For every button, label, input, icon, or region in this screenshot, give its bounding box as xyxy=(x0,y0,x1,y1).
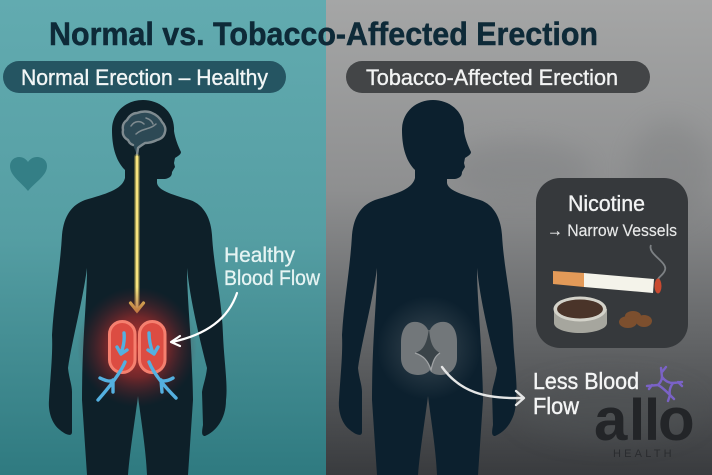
silhouette: tobacco body xyxy=(339,100,517,475)
logo: allo health: l xyxy=(644,388,660,453)
logo: allo health: a xyxy=(594,386,628,453)
icon: heart xyxy=(10,157,47,191)
logo: allo health xyxy=(594,386,695,460)
logo: allo health: o xyxy=(658,386,695,453)
organ: reduced tissue, grey xyxy=(377,296,481,400)
label: less blood flow: Less Blood xyxy=(533,368,639,394)
logo: allo health: HEALTH xyxy=(613,448,675,460)
logo: allo health: l xyxy=(629,388,645,453)
panel: nicotine callout: Nicotine xyxy=(568,191,645,216)
panel: tobacco background with smoke xyxy=(326,0,712,475)
arrow: healthy blood flow xyxy=(171,293,237,346)
heading pill: normal: Normal Erection – Healthy xyxy=(21,65,268,90)
icon: brain xyxy=(123,112,165,155)
label: less blood flow: Flow xyxy=(533,393,579,419)
heading pill: tobacco xyxy=(346,61,650,93)
label: healthy blood flow: Healthy xyxy=(224,244,295,267)
panel: nicotine callout: → Narrow Vessels xyxy=(547,221,677,240)
organ glow and erectile tissue xyxy=(77,287,197,407)
heading pill: tobacco: Tobacco-Affected Erection xyxy=(366,65,618,90)
icon: purple nerve star xyxy=(647,367,682,401)
label: healthy blood flow xyxy=(224,244,321,290)
arrow: less blood flow xyxy=(442,367,524,405)
icon: snuff tin xyxy=(554,296,607,333)
silhouette: normal body xyxy=(49,100,227,475)
panel: normal background xyxy=(0,0,326,475)
icon: cigarette xyxy=(553,245,665,294)
label: healthy blood flow: Blood Flow xyxy=(224,267,321,290)
arrow: nerve signal xyxy=(130,157,144,311)
panel: nicotine callout xyxy=(536,178,688,348)
label: less blood flow xyxy=(533,368,639,419)
title: Normal vs. Tobacco-Affected Erection xyxy=(49,16,598,52)
icon: blue blood vessels xyxy=(98,333,176,400)
icon: tobacco pouches xyxy=(619,311,652,328)
